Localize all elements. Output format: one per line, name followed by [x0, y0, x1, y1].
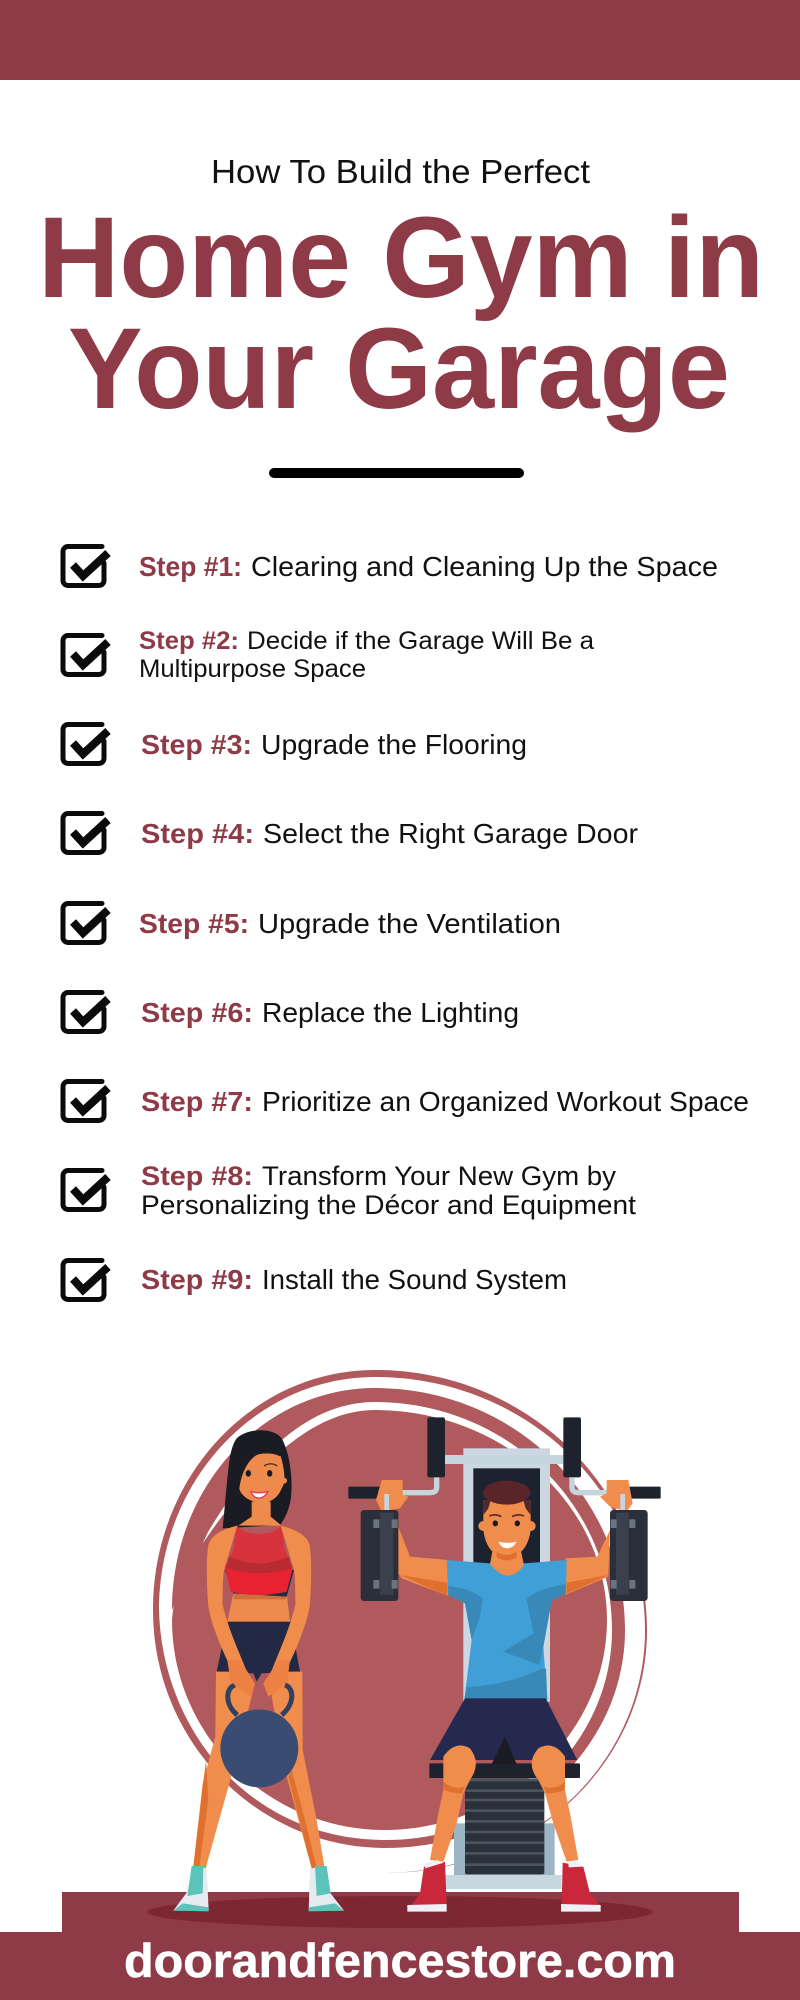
step 8: Step #8: [141, 1161, 253, 1191]
step 6: Replace the Lighting [262, 997, 519, 1028]
man shoes [407, 1860, 601, 1912]
step 7 [63, 1082, 749, 1120]
step 9 [63, 1260, 567, 1300]
step 7: Prioritize an Organized Workout Space [262, 1086, 749, 1117]
step 1 [63, 546, 718, 586]
top band [0, 0, 800, 80]
step 2: Decide if the Garage Will Be a [247, 627, 594, 655]
step 6 [63, 992, 519, 1032]
step 8: Transform Your New Gym by [262, 1161, 617, 1191]
title [38, 194, 764, 433]
step 1: Clearing and Cleaning Up the Space [251, 551, 718, 582]
step 2 [63, 627, 594, 683]
website footer text: doorandfencestore.com [124, 1934, 676, 1987]
floor shadow [147, 1896, 653, 1928]
step 8 [63, 1161, 637, 1220]
step 9: Install the Sound System [262, 1264, 567, 1295]
step 4: Step #4: [141, 818, 254, 849]
step 7: Step #7: [141, 1086, 253, 1117]
steps checklist [63, 546, 749, 1300]
step 5: Upgrade the Ventilation [258, 908, 561, 939]
step 3: Upgrade the Flooring [261, 729, 527, 760]
step 1: Step #1: [139, 551, 242, 582]
step 9: Step #9: [141, 1264, 253, 1295]
step 5 [63, 904, 561, 942]
title: Your Garage [68, 305, 730, 433]
t-shirt [447, 1560, 567, 1700]
machine base and weight stack [429, 1763, 580, 1889]
step 2: Multipurpose Space [139, 655, 366, 683]
step 5: Step #5: [139, 908, 249, 939]
title: Home Gym in [38, 194, 764, 322]
step 6: Step #6: [141, 997, 253, 1028]
man legs [430, 1746, 578, 1862]
subtitle: How To Build the Perfect [211, 153, 590, 190]
step 8: Personalizing the Décor and Equipment [141, 1190, 637, 1220]
footer platform [0, 1892, 800, 2000]
title underline [269, 468, 524, 478]
step 3: Step #3: [141, 729, 252, 760]
man on chest press machine [348, 1417, 661, 1912]
machine frame [348, 1417, 661, 1702]
step 4 [63, 814, 638, 852]
woman with kettlebell [173, 1430, 344, 1911]
step 4: Select the Right Garage Door [263, 818, 638, 849]
background spiral disc [153, 1370, 647, 1873]
man head [478, 1481, 536, 1576]
step 2: Step #2: [139, 627, 239, 655]
woman shoes [173, 1866, 344, 1911]
step 3 [63, 724, 527, 764]
